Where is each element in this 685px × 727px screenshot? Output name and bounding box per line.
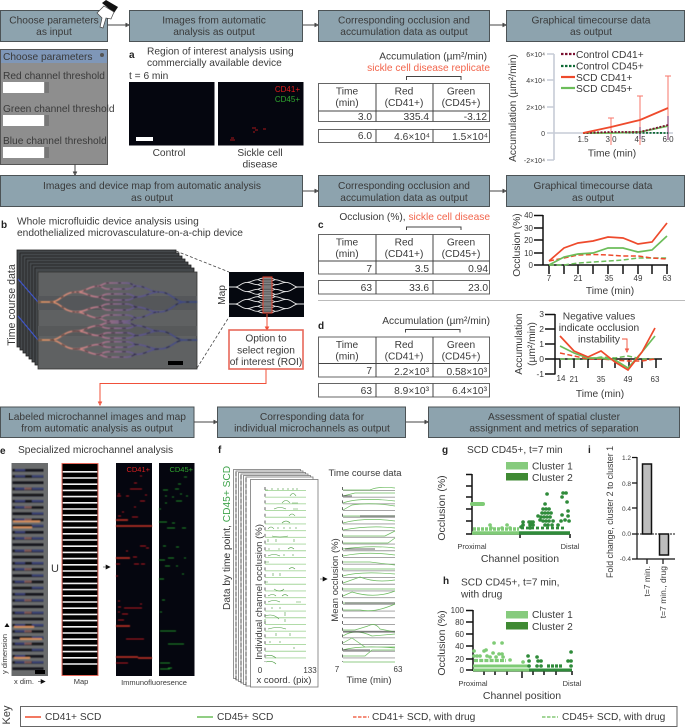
panel a heading: t = 6 min (129, 71, 168, 82)
panel d heading (318, 316, 490, 332)
table d: accumulation: Red (395, 340, 414, 351)
image: microchannel brightfield strip (12, 463, 48, 676)
chart: accumulation with instability note: Accumulation (514, 313, 525, 375)
callout: option to select region of interest: select region (237, 346, 295, 356)
chart: occlusion timecourse: 21 (574, 274, 583, 283)
label: immunofluorescence: Immunofluoresence (121, 678, 187, 687)
image: immunofluorescence CD41+ (116, 463, 152, 676)
scatter plot g: occlusion by position: Distal (561, 542, 580, 551)
table d: accumulation: 8.9×10³ (394, 386, 430, 397)
workflow box: individual microchannel data: Corresponding data for (260, 412, 365, 423)
chart: time course per channel: Time (min) (346, 675, 392, 686)
table c: occlusion (318, 234, 490, 294)
chart: accumulation with instability note: 49 (624, 375, 633, 384)
workflow box: occlusion and accumulation data: Corresponding occlusion and (338, 16, 470, 26)
chart: accumulation timecourse: Control CD45+ (576, 62, 644, 72)
chart stack: individual channel occlusion: x coord. (pix) (257, 675, 311, 686)
image: immunofluorescence CD41+: CD41+ (126, 465, 151, 474)
image: device map with ROI (229, 272, 304, 317)
workflow box: labeled microchannel images (0, 407, 194, 438)
chart: accumulation timecourse: 6×10⁴ (526, 52, 545, 59)
table d: accumulation: 6.4×10³ (452, 386, 488, 397)
chart: occlusion timecourse (512, 211, 672, 297)
legend g: Cluster 2 (532, 473, 573, 484)
table a heading: sickle cell disease replicate (367, 63, 490, 74)
chart stack: individual channel occlusion: 0 (258, 666, 263, 675)
chart: time course per channel: 63 (394, 665, 403, 674)
chart: accumulation with instability note: 63 (651, 375, 660, 384)
panel: choose parameters dialog: Green channel threshold (3, 104, 115, 115)
table d: accumulation: 63 (361, 386, 372, 397)
panel: choose parameters dialog: Blue channel threshold (3, 136, 107, 147)
chart: time course per channel: 7 (335, 665, 340, 674)
key legend: CD45+ SCD, with drug (562, 712, 666, 723)
chart: accumulation timecourse: Time (min) (588, 148, 636, 160)
chart: accumulation with instability note: Negative values (563, 312, 635, 322)
panel b heading (1, 216, 243, 239)
bar chart i: fold change: 0.4 (622, 506, 631, 513)
table c: occlusion: (min) (335, 249, 359, 260)
arrow: parameters down to device map (74, 164, 76, 175)
chart: accumulation timecourse: Accumulation (µm²/min) (508, 54, 519, 162)
workflow box: graphical timecourse data (506, 10, 684, 42)
chart: accumulation with instability note: 14 (557, 374, 566, 383)
panel d heading: d (318, 321, 324, 332)
workflow box: occlusion and accumulation data row 2 (318, 176, 490, 206)
chart: accumulation timecourse (508, 50, 674, 165)
panel b heading: b (1, 220, 7, 231)
scatter plot h: occlusion with drug: 40 (455, 642, 465, 651)
callout: option to select region of interest: of interest (ROI) (230, 357, 302, 368)
panel f heading: f (218, 445, 222, 456)
icon: pointing hand cursor (97, 0, 118, 28)
image: control (129, 82, 214, 159)
table d: accumulation: 2.2×10³ (394, 367, 430, 378)
table c: occlusion: (CD45+) (442, 249, 480, 260)
workflow box: spatial cluster assessment: Assessment of spatial cluster (488, 412, 621, 423)
arrow: images to data (303, 24, 318, 26)
panel a heading (129, 46, 294, 82)
table a: accumulation (318, 84, 490, 143)
image stack: whole device time course (17, 250, 197, 369)
chart: occlusion timecourse: Time (min) (586, 286, 634, 297)
image: sickle cell disease: Sickle cell (237, 148, 283, 159)
key label: Key (1, 705, 13, 724)
image: microchannel map: Map (74, 677, 88, 686)
chart: occlusion timecourse: Occlusion (%) (512, 213, 523, 277)
chart: accumulation with instability note: 1 (539, 339, 544, 349)
chart: accumulation with instability note: 0 (539, 354, 544, 364)
table a: accumulation: (CD41+) (385, 98, 423, 109)
chart: accumulation with instability note: 35 (597, 375, 606, 384)
arrow: input to images (108, 24, 129, 26)
legend h (506, 610, 573, 633)
workflow box: labeled microchannel images: from automatic analysis as output (21, 424, 173, 434)
arrow: device map to data (303, 190, 318, 192)
panel: choose parameters dialog: Red channel threshold (3, 71, 105, 82)
table a: accumulation: -3.12 (464, 112, 487, 123)
label: y dimension axis: y dimension (0, 634, 9, 674)
table c: occlusion: (CD41+) (385, 249, 423, 260)
panel g heading: SCD CD45+, t=7 min (467, 445, 563, 456)
table d: accumulation: 0.58×10³ (446, 367, 488, 378)
chart stack: individual channel occlusion: Individual channel occlusion (%) (254, 524, 265, 660)
arrow: map to ROI option (266, 314, 268, 330)
workflow box: graphical timecourse data row 2: Graphical timecourse data (534, 181, 653, 192)
workflow box: labeled microchannel images: Labeled microchannel images and map (8, 412, 186, 423)
scatter plot h: occlusion with drug: Occlusion (%) (436, 610, 448, 676)
chart: occlusion timecourse: 7 (547, 274, 552, 283)
table d: accumulation: (CD41+) (385, 352, 423, 362)
chart: time course per channel: Mean occlusion (%) (330, 538, 341, 622)
panel c heading: c (318, 220, 324, 231)
chart: occlusion timecourse: 0 (529, 261, 534, 270)
scatter plot h: occlusion with drug: 60 (455, 630, 465, 639)
chart: accumulation timecourse: 3.0 (605, 135, 617, 144)
workflow box: graphical timecourse data: Graphical timecourse data (532, 16, 651, 26)
workflow box: occlusion and accumulation data (318, 10, 490, 42)
table a: accumulation: 6.0 (358, 131, 372, 142)
chart: accumulation timecourse: 4×10⁴ (526, 78, 545, 85)
bar chart i: fold change: 0.0 (622, 531, 631, 538)
scatter plot g: occlusion by position: Proximal (457, 542, 487, 551)
label: x dimension axis (14, 677, 45, 686)
scatter plot h: occlusion with drug: 0 (460, 666, 465, 675)
workflow box: occlusion and accumulation data row 2: accumulation data as output (340, 193, 468, 204)
arrow: individual data to assessment (406, 420, 428, 424)
key legend: CD41+ SCD, with drug (372, 712, 476, 723)
image: sickle cell disease: CD41+ (275, 85, 300, 94)
workflow box: spatial cluster assessment: assignment and metrics of separation (469, 424, 639, 434)
chart: accumulation timecourse: 6.0 (662, 135, 674, 144)
table d: accumulation: 7 (366, 366, 372, 377)
arrow: ROI to labeled microchannels (98, 369, 266, 405)
panel: choose parameters dialog: Choose parameters (3, 52, 92, 63)
key legend: CD41+ SCD (45, 712, 101, 723)
workflow box: images and device map: Images and device map from automatic analysis (43, 181, 261, 192)
workflow box: choose parameters as input: Choose parameters (9, 16, 99, 26)
panel g heading: g (442, 445, 448, 456)
chart: occlusion timecourse: 30 (524, 224, 534, 233)
chart: accumulation with instability note: (µm²/min) (527, 322, 538, 366)
table a: accumulation: 3.0 (358, 112, 372, 123)
chart: accumulation timecourse: Control CD41+ (576, 50, 644, 61)
scatter plot h: occlusion with drug: Channel position (483, 690, 561, 702)
panel i label: i (588, 445, 591, 456)
table a: accumulation: 1.5×10⁴ (452, 132, 488, 143)
chart: occlusion timecourse: 20 (524, 236, 534, 245)
table a: accumulation: 335.4 (404, 112, 429, 123)
chart: time course per channel: Time course data (328, 468, 402, 479)
workflow box: choose parameters as input (0, 10, 108, 42)
image: sickle cell disease: CD45+ (275, 95, 300, 104)
chart: accumulation with instability note: instability (578, 334, 621, 346)
divider between c and d (318, 300, 685, 302)
chart: occlusion timecourse: 63 (663, 274, 672, 283)
chart: time course per channel (328, 468, 403, 686)
label: data by time point: Data by time point, CD45+ SCD (222, 466, 233, 610)
workflow box: graphical timecourse data row 2: as output (572, 193, 614, 204)
panel c heading (318, 212, 490, 231)
panel h heading: SCD CD45+, t=7 min, (461, 578, 560, 588)
arrow: channel data to time course (320, 577, 327, 581)
table c: occlusion: 33.6 (409, 283, 429, 294)
chart: accumulation timecourse: -2×10⁴ (524, 158, 545, 165)
panel e heading: Specialized microchannel analysis (18, 445, 173, 456)
chart: occlusion timecourse: 10 (524, 249, 534, 258)
table d: accumulation: Time (336, 340, 358, 351)
chart: accumulation timecourse: SCD CD45+ (576, 84, 632, 95)
table d: accumulation: (min) (335, 352, 359, 362)
arrow: map to immunofluorescence (103, 565, 110, 569)
panel a heading: Region of interest analysis using (147, 46, 294, 58)
chart: accumulation timecourse: 4.5 (634, 135, 646, 144)
legend h: Cluster 1 (532, 610, 573, 621)
table a: accumulation: Time (336, 86, 358, 98)
label: time course data: Time course data (6, 264, 18, 346)
workflow box: individual microchannel data (218, 407, 406, 438)
table a: accumulation: Green (447, 86, 475, 98)
chart: accumulation with instability note: 21 (570, 375, 579, 384)
table a heading (367, 52, 490, 80)
workflow box: spatial cluster assessment (428, 407, 680, 438)
chart: accumulation timecourse: 2×10⁴ (526, 105, 545, 112)
arrow: labeled images to individual data (194, 420, 217, 424)
chart: accumulation timecourse: SCD CD41+ (576, 73, 632, 84)
table c: occlusion: Red (395, 238, 414, 248)
workflow box: individual microchannel data: individual microchannels as output (234, 424, 390, 434)
chart: occlusion timecourse: 40 (524, 211, 534, 220)
panel e heading: e (0, 446, 6, 457)
legend h: Cluster 2 (532, 622, 573, 633)
panel d heading: Accumulation (µm²/min) (382, 316, 490, 327)
table c: occlusion: 63 (361, 283, 372, 294)
label: x dimension axis: x dim. (14, 677, 34, 686)
legend g: Cluster 1 (532, 462, 573, 472)
chart: occlusion timecourse: 35 (605, 274, 614, 283)
table a heading: Accumulation (µm²/min) (379, 52, 487, 62)
table a: accumulation: 4.6×10⁴ (394, 132, 430, 143)
table a: accumulation: Red (395, 86, 414, 98)
chart: accumulation with instability note: 3 (539, 309, 544, 319)
table d: accumulation (318, 337, 490, 397)
bar chart i: fold change: -0.4 (620, 556, 631, 563)
bar chart i: fold change: Fold change, cluster 2 to cluster 1 (605, 446, 615, 578)
panel: choose parameters dialog (0, 50, 115, 164)
scatter plot g: occlusion by position: Channel position (481, 553, 559, 565)
bar chart i: fold change: t=7 min. (642, 566, 652, 596)
workflow box: images from automatic analysis (130, 10, 302, 42)
scatter plot h: occlusion with drug: 80 (455, 618, 465, 627)
workflow box: images from automatic analysis: Images from automatic (162, 16, 266, 26)
workflow box: choose parameters as input: as input (36, 27, 72, 38)
panel h heading (443, 576, 560, 600)
bar chart i: fold change: 0.8 (622, 481, 631, 488)
image: sickle cell disease (218, 82, 304, 170)
workflow box: images and device map: as output (131, 193, 173, 204)
table c: occlusion: Time (336, 238, 358, 248)
panel h heading: with drug (460, 590, 503, 600)
table d: accumulation: (CD45+) (442, 352, 480, 362)
image: control: Control (153, 148, 185, 159)
workflow box: images and device map (0, 176, 302, 206)
scatter plot g: occlusion by position (436, 474, 580, 565)
chart stack: individual channel occlusion: 133 (303, 666, 317, 675)
scatter plot h: occlusion with drug (436, 606, 582, 702)
scatter plot h: occlusion with drug: 100 (451, 606, 465, 615)
chart: accumulation timecourse: 0 (541, 131, 545, 138)
chart: accumulation timecourse: 1.5 (577, 135, 589, 144)
chart: accumulation with instability note: -1 (536, 369, 544, 379)
panel a heading: a (129, 50, 135, 61)
arrow: data to graph (490, 24, 506, 26)
bar chart i: fold change (605, 446, 675, 618)
workflow box: graphical timecourse data row 2 (506, 176, 684, 206)
chart: accumulation with instability note (514, 309, 662, 400)
panel h heading: h (443, 576, 449, 587)
scatter plot h: occlusion with drug: Distal (563, 679, 582, 688)
panel a heading: commercially available device (147, 58, 282, 69)
callout: option to select region of interest: Option to (245, 334, 287, 344)
workflow box: occlusion and accumulation data: accumulation data as output (340, 27, 468, 38)
image: sickle cell disease: disease (242, 160, 278, 170)
chart: accumulation with instability note: indicate occlusion (559, 323, 639, 334)
image: immunofluorescence CD45+: CD45+ (169, 465, 194, 474)
scatter plot g: occlusion by position: Occlusion (%) (436, 475, 448, 541)
image: immunofluorescence CD45+ (159, 463, 194, 676)
table c: occlusion: 7 (366, 264, 372, 275)
table c: occlusion: Green (447, 238, 475, 248)
table c: occlusion: 3.5 (415, 264, 429, 275)
image: microchannel map (62, 464, 98, 686)
key legend: CD45+ SCD (217, 712, 273, 723)
scatter plot h: occlusion with drug: Proximal (458, 679, 488, 688)
table c: occlusion: 23.0 (468, 283, 488, 294)
chart: occlusion timecourse: 49 (634, 274, 643, 283)
chart stack: individual channel occlusion (234, 470, 318, 687)
label: map: Map (217, 285, 228, 305)
scatter plot h: occlusion with drug: 20 (455, 655, 465, 664)
symbol: union: U (51, 563, 59, 575)
panel c heading: Occlusion (%), sickle cell disease (339, 212, 490, 223)
chart: accumulation with instability note: Time (min) (576, 389, 624, 400)
workflow box: images from automatic analysis: analysis as output (173, 27, 255, 38)
legend g (506, 462, 573, 484)
arrow: row 2 data to graph (490, 190, 506, 192)
bar chart i: fold change: 1.2 (622, 455, 631, 462)
key legend (20, 706, 677, 726)
workflow box: occlusion and accumulation data row 2: Corresponding occlusion and (338, 181, 470, 192)
table a: accumulation: (CD45+) (442, 98, 480, 109)
table c: occlusion: 0.94 (468, 264, 488, 275)
panel b heading: Whole microfluidic device analysis using (17, 216, 199, 228)
chart: accumulation with instability note: 2 (539, 324, 544, 334)
callout: option to select region of interest (229, 330, 303, 369)
panel b heading: endothelialized microvasculature-on-a-chip device (17, 228, 243, 239)
zoom guide lines (176, 251, 229, 368)
table a: accumulation: (min) (335, 98, 359, 109)
bar chart i: fold change: t=7 min., drug (658, 566, 668, 618)
workflow box: graphical timecourse data: as output (570, 27, 612, 38)
table d: accumulation: Green (447, 340, 475, 351)
